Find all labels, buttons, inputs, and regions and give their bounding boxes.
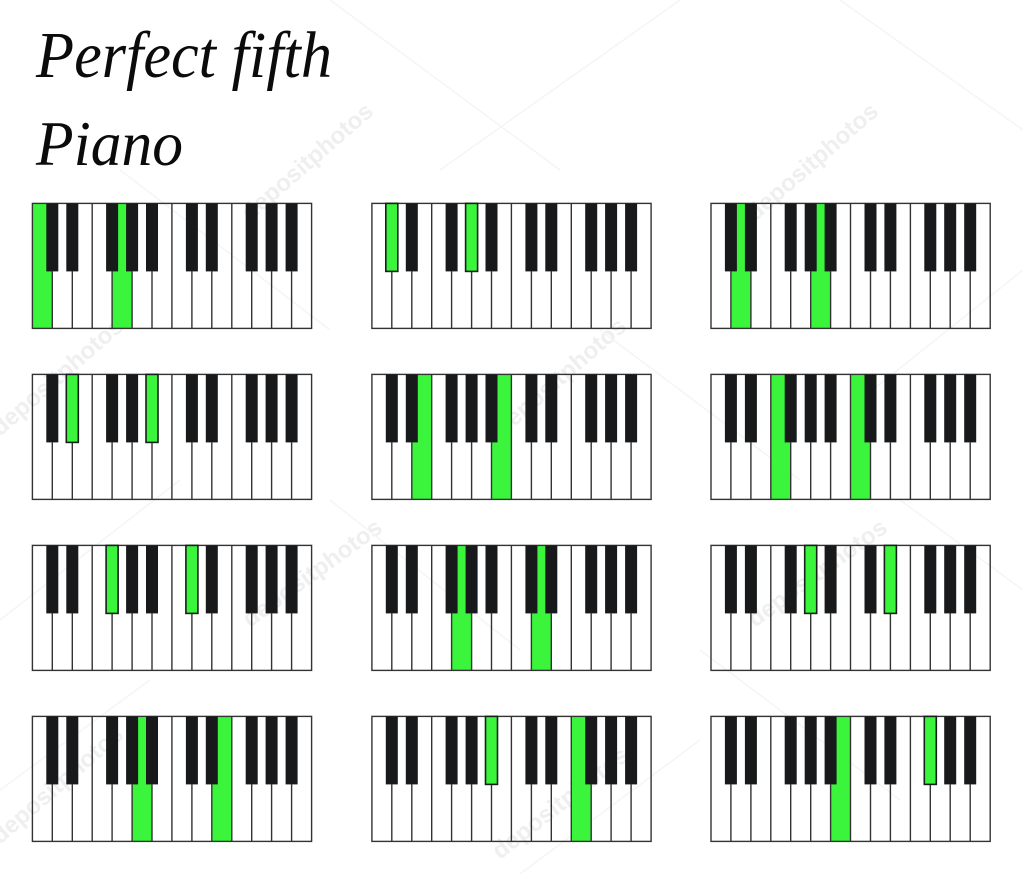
- watermark: depositphotos: [743, 514, 892, 633]
- keyboard row 2 col 3: [711, 374, 990, 499]
- keyboard row 1 col 3: [711, 203, 990, 328]
- keyboard row 2 col 1: [32, 374, 312, 499]
- title: Perfect fifth: Perfect fifth: [35, 19, 332, 92]
- watermark: depositphotos: [489, 313, 632, 442]
- watermark: depositphotos: [487, 742, 634, 865]
- keyboard row 4 col 3: [711, 716, 990, 841]
- keyboard row 4 col 2: [372, 716, 651, 841]
- keyboard row 2 col 2: [372, 374, 651, 499]
- watermark: depositphotos: [741, 98, 884, 227]
- keyboard row 3 col 1: [32, 545, 312, 670]
- watermark: depositphotos: [238, 514, 387, 633]
- keyboard row 3 col 2: [372, 545, 651, 670]
- keyboard row 1 col 2: [372, 203, 651, 328]
- title: Piano: Piano: [35, 108, 183, 179]
- keyboard row 4 col 1: [32, 716, 312, 841]
- keyboard row 3 col 3: [711, 545, 990, 670]
- watermark: depositphotos: [236, 98, 379, 227]
- keyboard row 1 col 1: [32, 203, 312, 328]
